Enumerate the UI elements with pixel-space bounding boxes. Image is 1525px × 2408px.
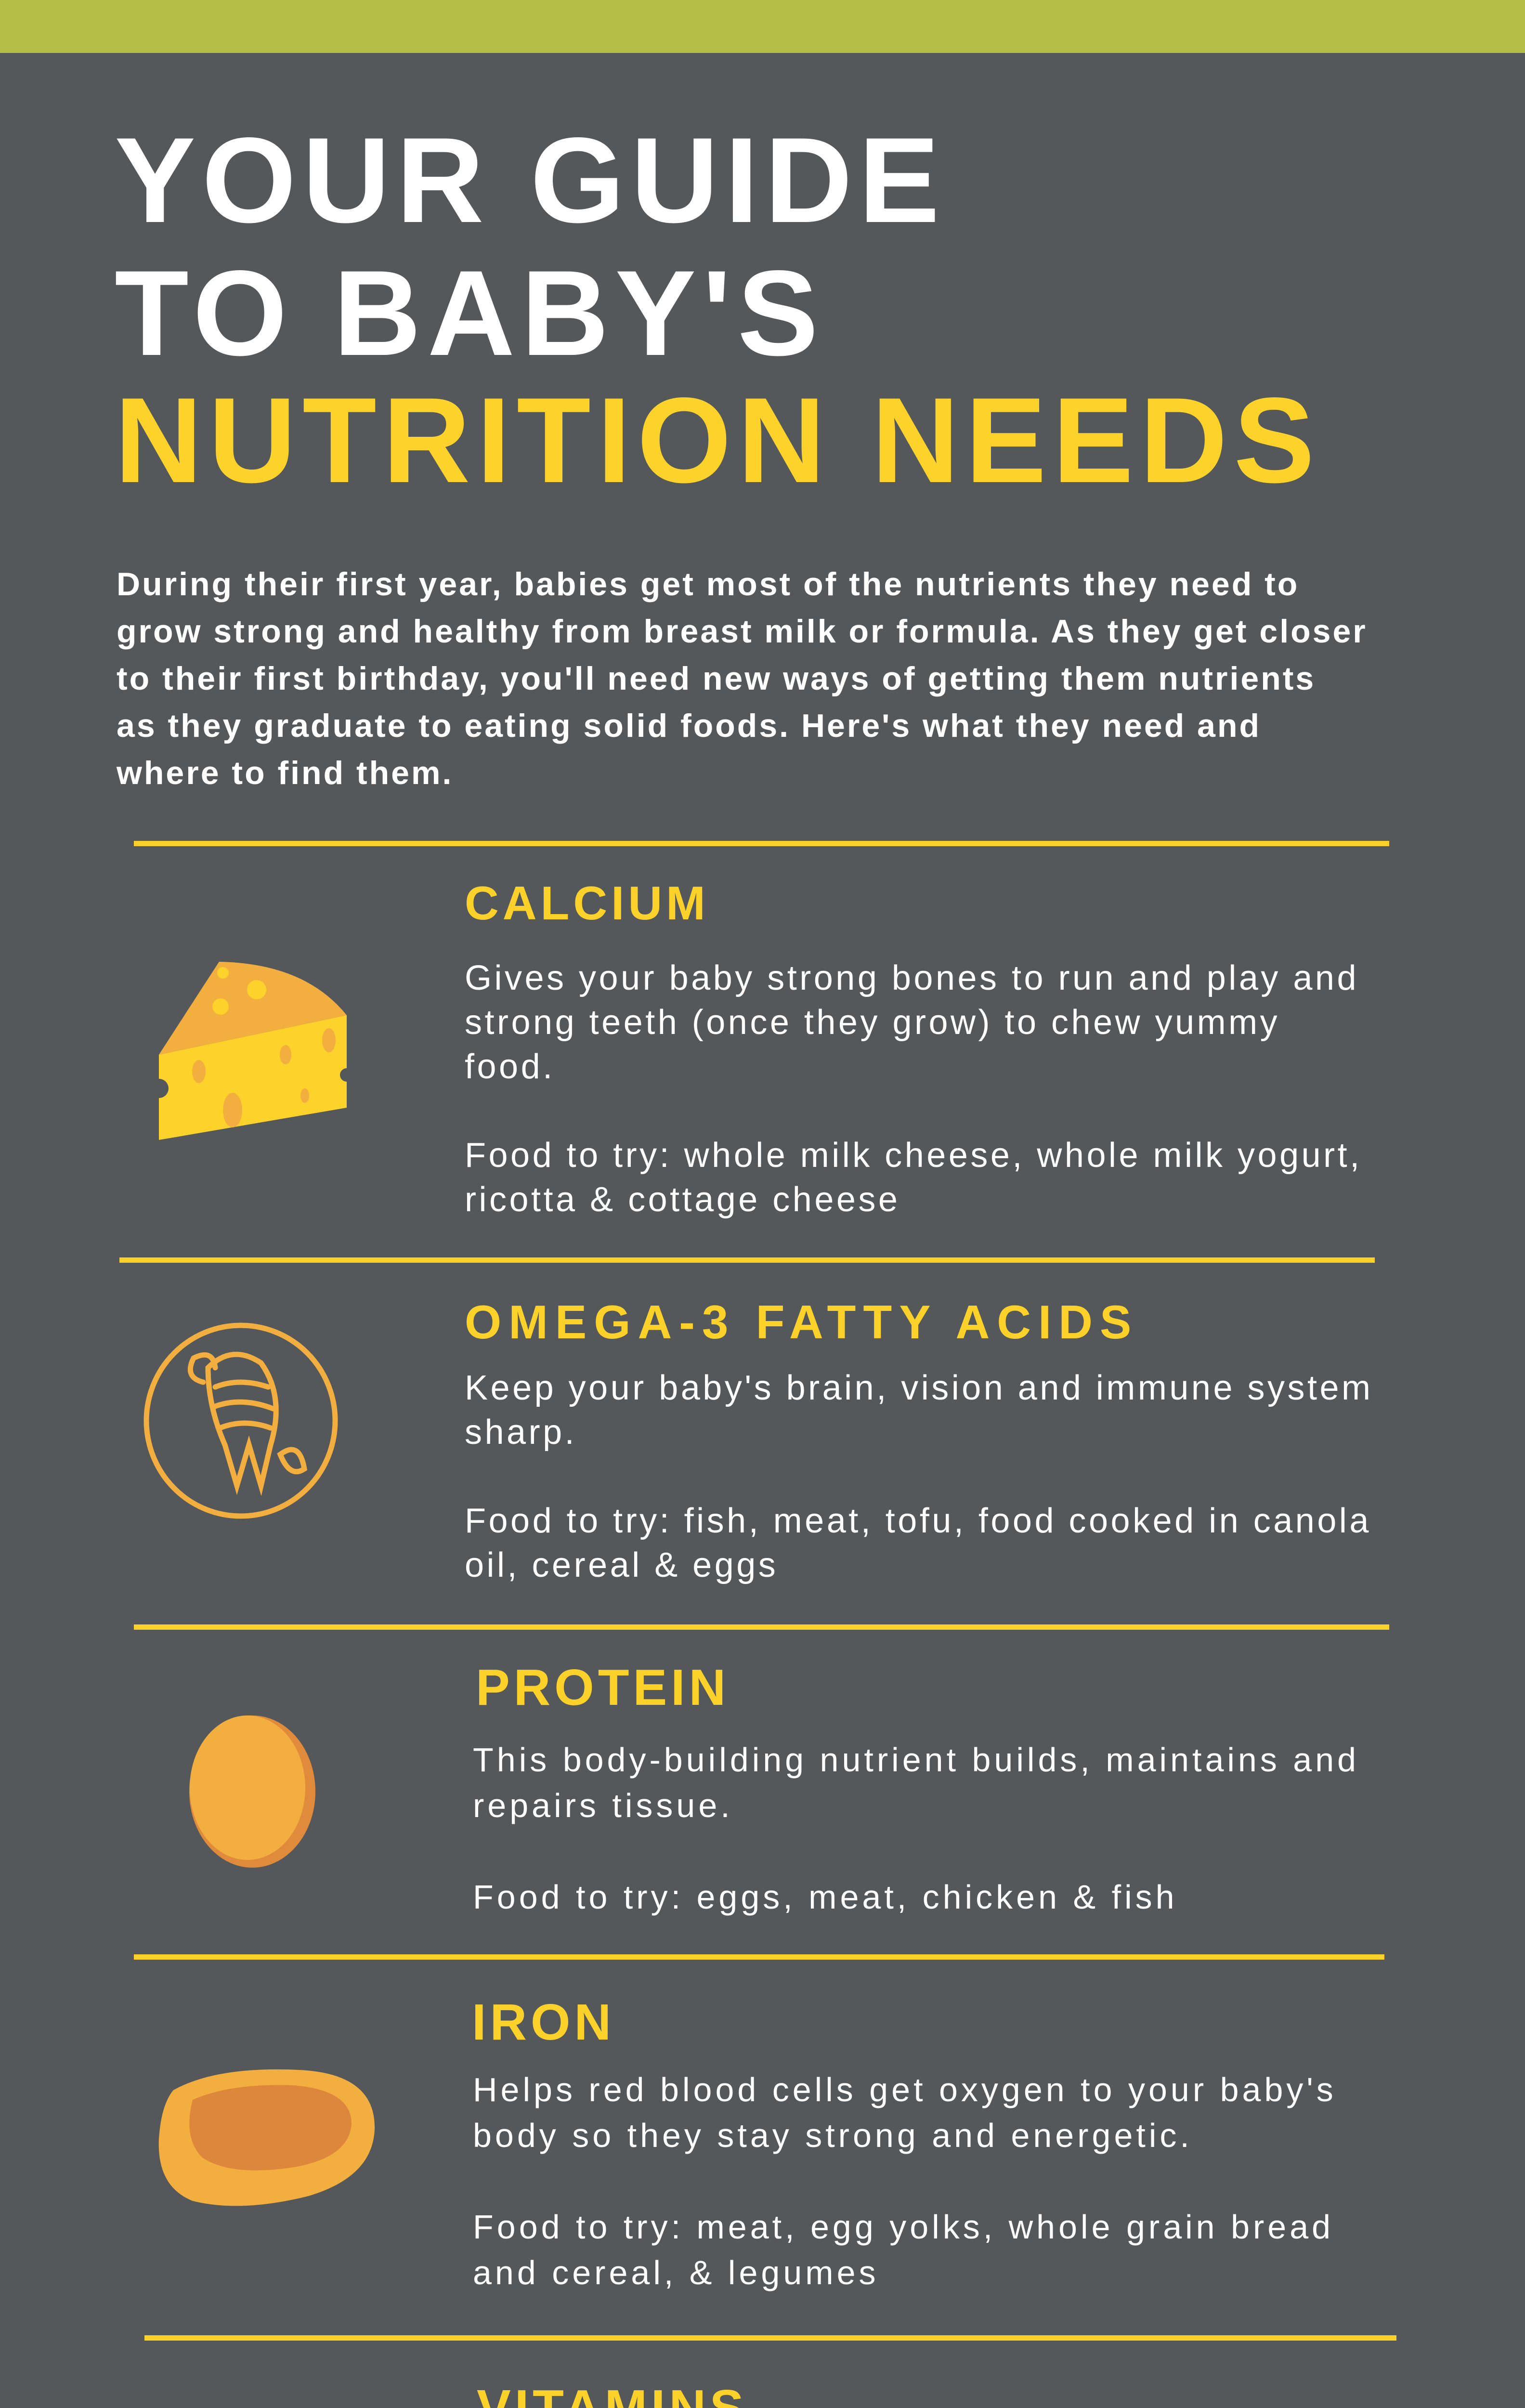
intro text: as they graduate to eating solid foods. Here's what they need and bbox=[117, 707, 1261, 744]
text: calcium: food. bbox=[465, 1047, 555, 1086]
text: iron: and cereal, & legumes bbox=[473, 2254, 879, 2291]
icon: egg bbox=[189, 1715, 315, 1868]
icon: cheese bbox=[159, 962, 347, 1140]
text: iron: body so they stay strong and energetic. bbox=[473, 2117, 1193, 2154]
heading: iron: IRON bbox=[472, 1994, 615, 2051]
text: omega-3: Keep your baby's brain, vision and immune system bbox=[465, 1369, 1373, 1407]
text: omega-3: Food to try: fish, meat, tofu, food cooked in canola bbox=[465, 1502, 1371, 1540]
heading: omega-3: OMEGA-3 FATTY ACIDS bbox=[465, 1296, 1138, 1348]
heading: protein: PROTEIN bbox=[476, 1659, 730, 1716]
text: omega-3 bbox=[465, 1369, 1373, 1584]
text: calcium: Gives your baby strong bones to run and play and bbox=[465, 959, 1359, 997]
panel: iron bbox=[159, 1994, 1337, 2291]
text: protein: This body-building nutrient builds, maintains and bbox=[473, 1741, 1359, 1779]
text: iron: Food to try: meat, egg yolks, whole grain bread bbox=[473, 2208, 1334, 2246]
text: calcium: strong teeth (once they grow) to chew yummy bbox=[465, 1003, 1280, 1042]
heading: calcium: CALCIUM bbox=[465, 877, 709, 929]
title bbox=[115, 113, 1321, 508]
text: protein bbox=[473, 1741, 1359, 1916]
text: protein: repairs tissue. bbox=[473, 1787, 733, 1824]
title: NUTRITION NEEDS bbox=[115, 373, 1321, 508]
panel: omega-3 bbox=[143, 1296, 1373, 1584]
text: omega-3: sharp. bbox=[465, 1413, 577, 1452]
text: protein: Food to try: eggs, meat, chicken & fish bbox=[473, 1878, 1178, 1916]
intro text: grow strong and healthy from breast milk or formula. As they get closer bbox=[117, 613, 1368, 650]
title: YOUR GUIDE bbox=[115, 113, 946, 248]
text: calcium: Food to try: whole milk cheese, whole milk yogurt, bbox=[465, 1136, 1362, 1175]
text: omega-3: oil, cereal & eggs bbox=[465, 1546, 778, 1584]
text: iron bbox=[473, 2071, 1337, 2291]
text: iron: Helps red blood cells get oxygen to your baby's bbox=[473, 2071, 1337, 2108]
title: TO BABY'S bbox=[115, 246, 824, 381]
icon: fish in circle bbox=[143, 1322, 338, 1519]
panel: protein bbox=[189, 1659, 1359, 1916]
text: calcium: ricotta & cottage cheese bbox=[465, 1180, 900, 1219]
intro text bbox=[117, 566, 1368, 791]
top green bar bbox=[0, 0, 1525, 53]
panel: calcium bbox=[159, 877, 1362, 1219]
text: calcium bbox=[465, 959, 1362, 1219]
intro text: where to find them. bbox=[117, 755, 453, 791]
intro text: to their first birthday, you'll need new ways of getting them nutrients bbox=[117, 660, 1316, 697]
intro text: During their first year, babies get most of the nutrients they need to bbox=[117, 566, 1299, 602]
icon: steak bbox=[159, 2069, 375, 2206]
